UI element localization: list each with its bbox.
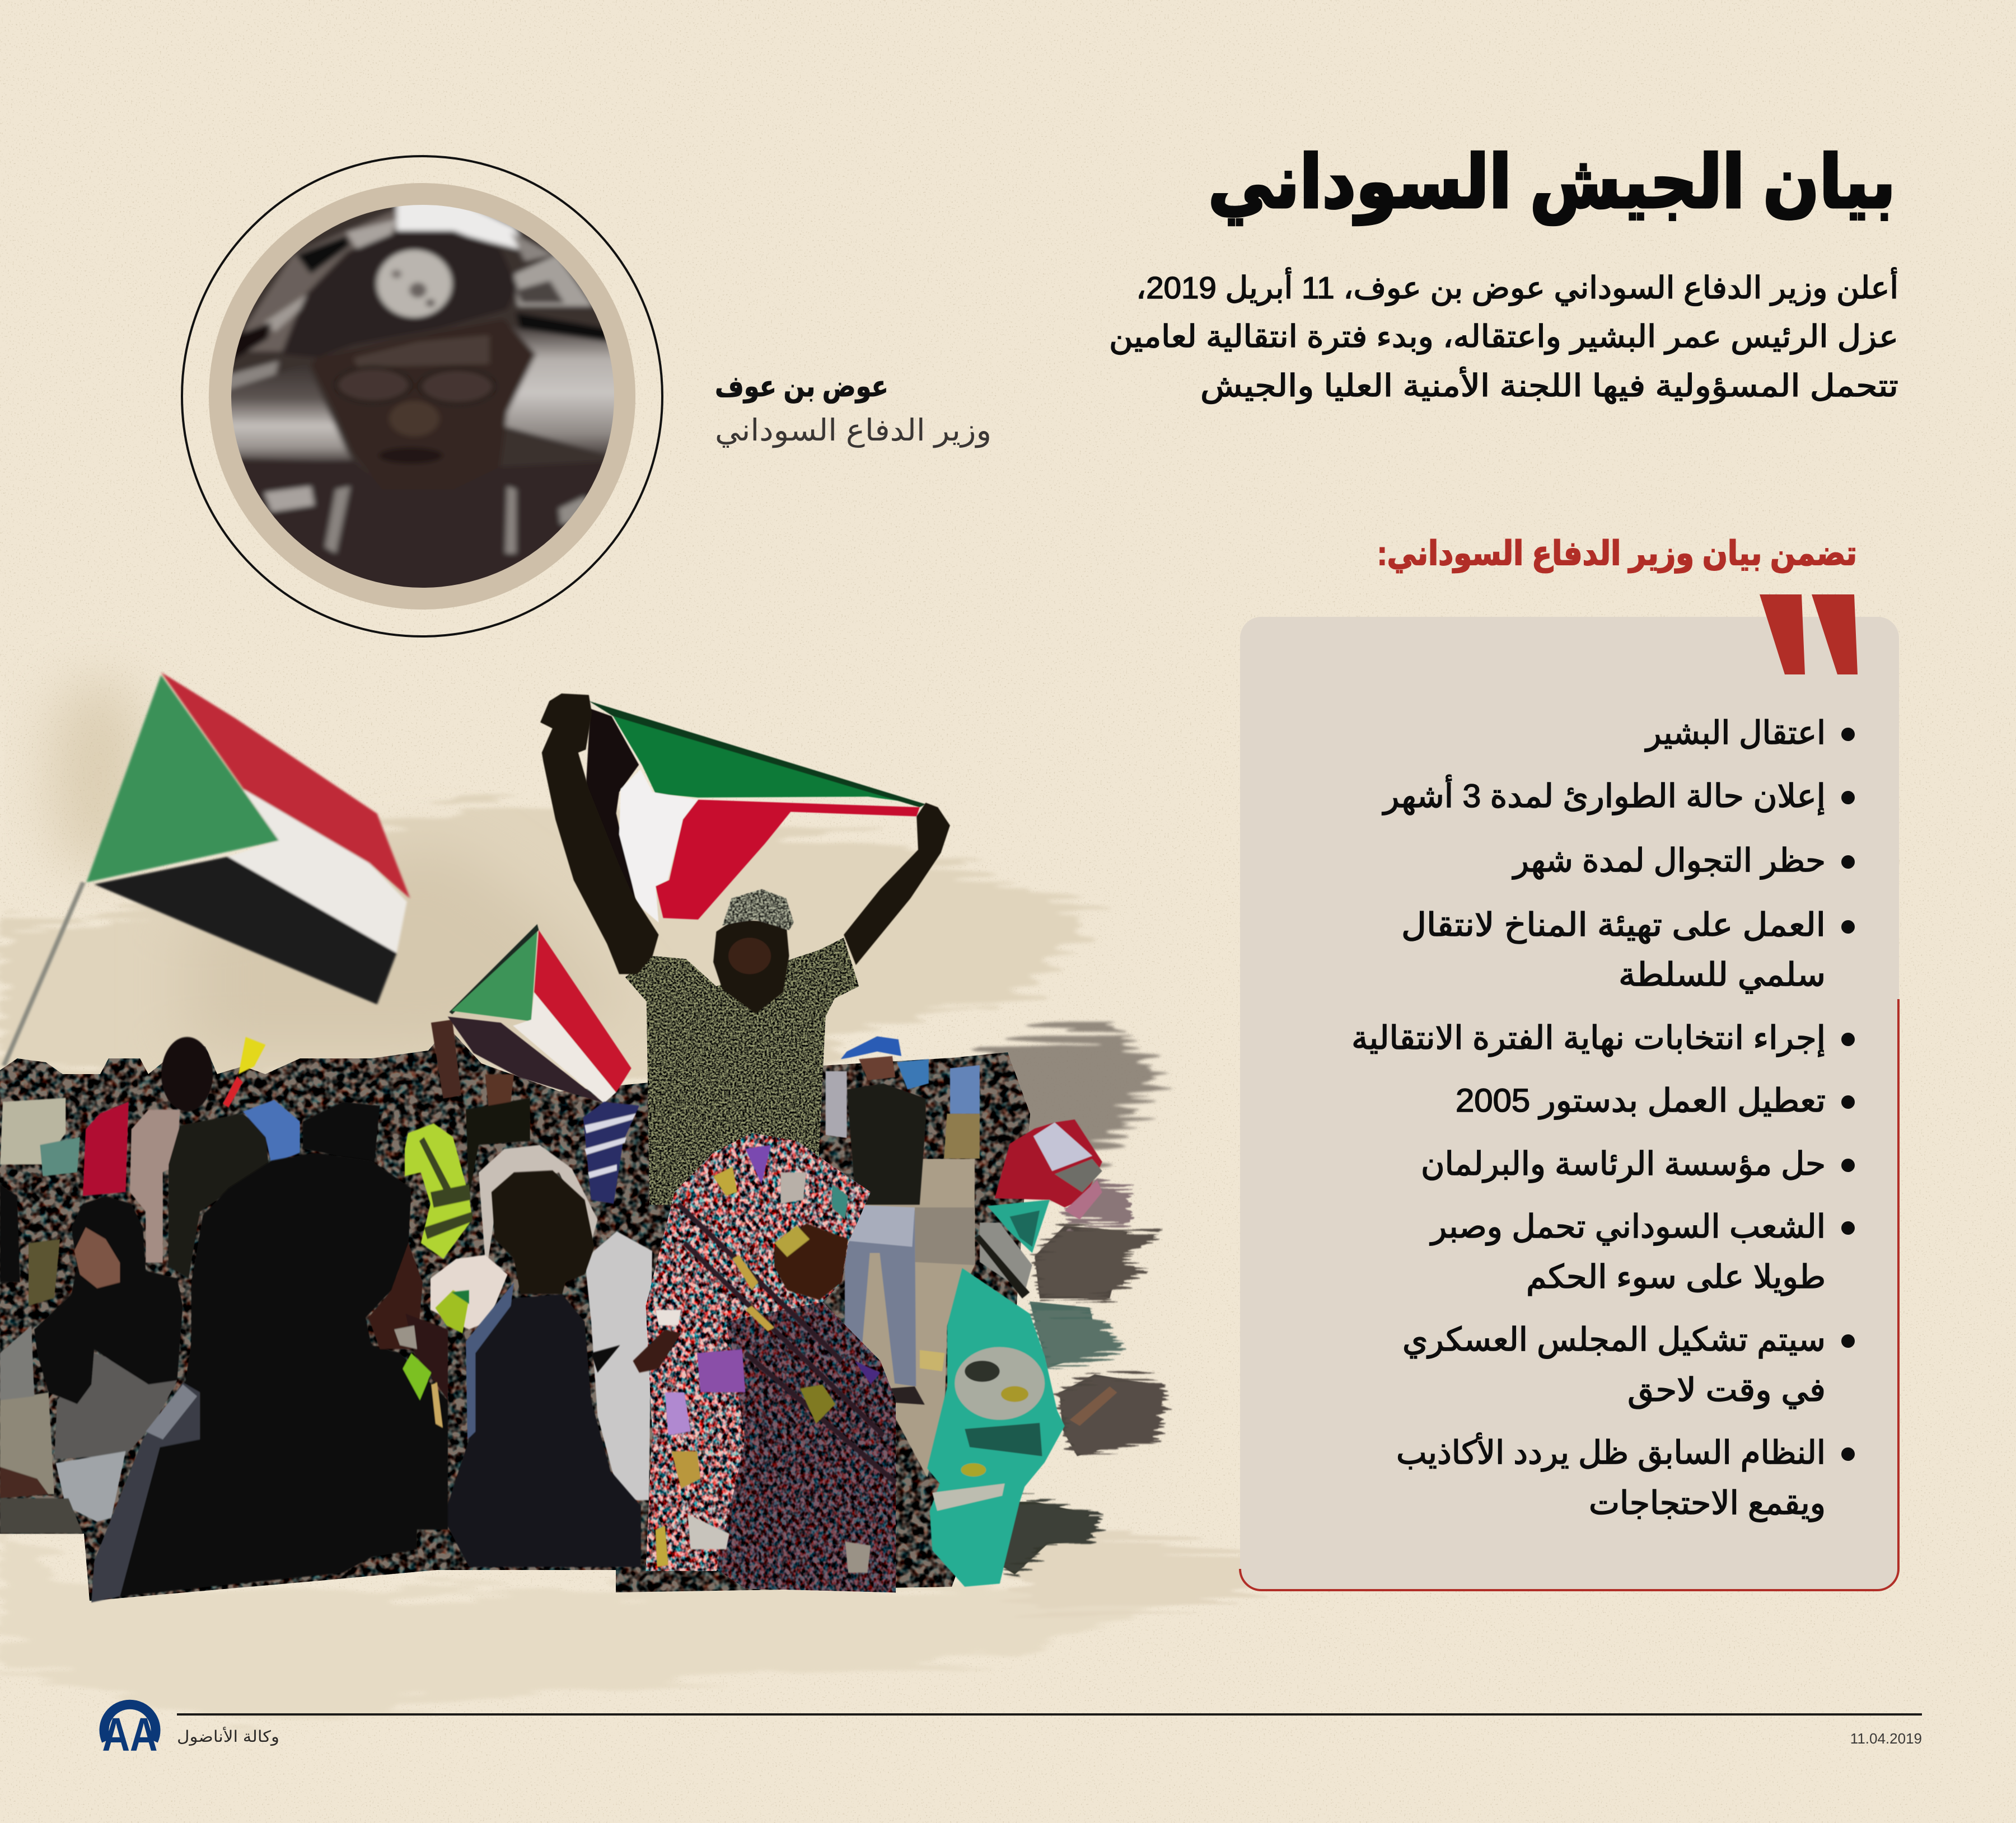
held flag <box>586 701 926 922</box>
item 1: اعتقال البشير <box>1644 715 1826 752</box>
panel background <box>1240 617 1899 1590</box>
date: 11.04.2019 <box>1850 1730 1922 1747</box>
section heading: تضمن بيان وزير الدفاع السوداني: <box>1377 535 1857 573</box>
green bottle <box>435 1290 469 1333</box>
item 10: ويقمع الاحتجاجات <box>1589 1485 1826 1522</box>
arms <box>540 693 950 974</box>
item 8: الشعب السوداني تحمل وصبر <box>1429 1208 1826 1246</box>
item 5: إجراء انتخابات نهاية الفترة الانتقالية <box>1351 1020 1826 1057</box>
item 10: النظام السابق ظل يردد الأكاذيب <box>1396 1432 1826 1472</box>
portrait tan ring <box>209 183 635 610</box>
footer rule <box>177 1713 1922 1716</box>
smear fingers <box>970 1180 1167 1574</box>
footer <box>102 1704 1922 1761</box>
intro paragraph <box>1109 268 1898 404</box>
large woman in black hijab <box>91 1153 448 1602</box>
name: عوض بن عوف <box>715 371 888 404</box>
intro paragraph: أعلن وزير الدفاع السوداني عوض بن عوف، 11 أبريل 2019، <box>1136 268 1898 306</box>
item 7: حل مؤسسة الرئاسة والبرلمان <box>1421 1146 1826 1183</box>
road behind the standing man <box>855 1159 975 1478</box>
small Sudanese flag <box>431 924 632 1103</box>
item 10 <box>1396 1432 1855 1522</box>
item 3: حظر التجوال لمدة شهر <box>1512 842 1826 880</box>
protest photo collage <box>0 672 1257 1727</box>
portrait of Awad Ibn Auf <box>182 156 662 636</box>
item 9 <box>1402 1321 1855 1409</box>
crowd base <box>0 1027 1030 1601</box>
dark mass behind teal dress <box>970 1226 1147 1574</box>
patterned dress woman <box>633 1133 896 1592</box>
boy in dark shirt <box>443 1170 641 1567</box>
intro paragraph: عزل الرئيس عمر البشير واعتقاله، وبدء فترة انتقالية لعامين <box>1109 319 1898 355</box>
middle crowd figures <box>405 1074 896 1592</box>
shirt <box>625 938 859 1205</box>
Anadolu Agency logo: AA <box>102 1708 158 1761</box>
title: بيان الجيش السوداني <box>1208 141 1896 225</box>
head and cap <box>713 889 794 1014</box>
item 4: العمل على تهيئة المناخ لانتقال <box>1401 907 1826 944</box>
jeans of standing man <box>845 1205 925 1405</box>
man holding flag and small flag <box>431 693 980 1205</box>
item 2: إعلان حالة الطوارئ لمدة 3 أشهر <box>1382 775 1826 816</box>
large Sudanese flag on pole <box>4 672 410 1066</box>
item 4: سلمي للسلطة <box>1619 957 1826 994</box>
item 6: تعطيل العمل بدستور 2005 <box>1456 1082 1826 1120</box>
statement panel <box>1240 594 1899 1590</box>
item 4 <box>1401 907 1855 994</box>
item 8: طويلا على سوء الحكم <box>1526 1259 1826 1296</box>
portrait photo <box>231 205 614 588</box>
portrait caption <box>715 371 991 448</box>
portrait outer ring <box>182 156 662 636</box>
right edge smear <box>974 1027 1163 1194</box>
item 9: سيتم تشكيل المجلس العسكري <box>1402 1321 1826 1359</box>
icon: quotation mark <box>1760 594 1858 674</box>
item 9: في وقت لاحق <box>1627 1372 1826 1409</box>
role: وزير الدفاع السوداني <box>715 414 991 448</box>
panel red border <box>1240 999 1898 1590</box>
left crowd figures <box>0 1037 380 1534</box>
right figures and teal dress woman <box>927 1119 1167 1587</box>
item 8 <box>1429 1208 1855 1296</box>
man in blue cap and black shirt <box>826 1037 980 1205</box>
intro paragraph: تتحمل المسؤولية فيها اللجنة الأمنية العليا والجيش <box>1200 367 1898 404</box>
brush washes behind photo <box>0 673 1257 1727</box>
agency name: وكالة الأناضول <box>177 1726 279 1746</box>
bullet list <box>1351 715 1855 1522</box>
